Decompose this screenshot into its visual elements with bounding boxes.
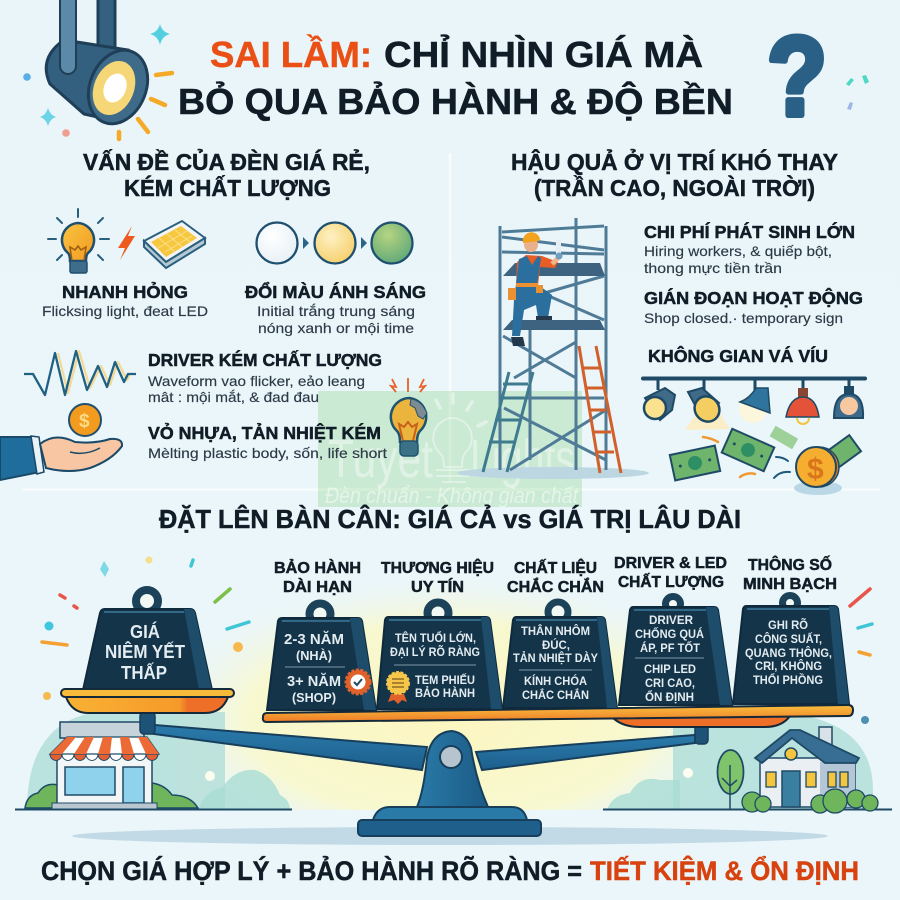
heading: consequences: (TRẦN CAO, NGOÀI TRỜI): [534, 174, 815, 201]
text: colour shift: nóng xanh or mội time: [258, 320, 414, 336]
icon: hand with coin: [0, 404, 122, 480]
title: [178, 34, 733, 122]
watermark: Đèn chuẩn - Không gian chất: [325, 483, 579, 508]
weight: solid materials: CHẤT LIỆU: [514, 559, 597, 577]
heading: problems: [83, 147, 370, 201]
text: patchy space: KHÔNG GIAN VÁ VÍU: [648, 345, 828, 366]
weight: solid materials: KÍNH CHÓA: [524, 675, 587, 688]
icon: money flying away: $: [807, 453, 824, 486]
conclusion: [41, 854, 859, 886]
scene backdrop: [27, 592, 873, 810]
ground shadow: [72, 827, 828, 845]
text: colour shift: ĐỔI MÀU ÁNH SÁNG: [245, 281, 426, 302]
panel: consequences in hard to reach spots: [457, 147, 865, 495]
weight: driver and LED quality: DRIVER & LED: [614, 555, 727, 572]
title: SAI LẦM:: [210, 34, 372, 75]
weight: solid materials: [503, 559, 617, 708]
illustration: shop: [25, 722, 198, 809]
text: disrupted operations: [644, 287, 863, 326]
icon: question mark: ?: [767, 14, 827, 139]
weight: transparent specs: MINH BẠCH: [743, 576, 837, 593]
icon: track spotlight: [46, 0, 158, 133]
icon: money flying away: [670, 426, 861, 495]
weight: low listed price: THẤP: [121, 662, 167, 683]
illustration: scaffold with worker: [457, 218, 649, 479]
weight: solid materials: CHẮC CHẮN: [507, 578, 604, 596]
heading: consequences: HẬU QUẢ Ở VỊ TRÍ KHÓ THAY: [511, 147, 838, 175]
orange pan: [61, 689, 234, 713]
weight: transparent specs: CÔNG SUẤT,: [755, 633, 822, 646]
weight group: long term value: [267, 555, 849, 710]
icon: question mark: [767, 14, 869, 139]
icon: hand with coin: $: [79, 411, 90, 432]
ground lines: [15, 808, 892, 810]
weight: reputable brand: TEM PHIẾU: [415, 674, 475, 687]
weight: solid materials: THÂN NHÔM: [521, 625, 590, 638]
weight: low listed price: NIÊM YẾT: [105, 641, 185, 662]
text: extra costs: thong mực tiền trần: [644, 260, 782, 276]
weight: long warranty: [267, 560, 376, 710]
title: CHỈ NHÌN GIÁ MÀ: [384, 34, 703, 75]
illustration: balance stand and beam: [140, 712, 708, 836]
icon: flicker waveform: [24, 351, 136, 395]
text: plastic housing: Mèlting plastic body, sốn, life short: [148, 445, 387, 461]
weight: reputable brand: [377, 559, 502, 709]
weight: solid materials: TẢN NHIỆT DÀY: [513, 652, 598, 665]
weight: long warranty: DÀI HẠN: [283, 579, 352, 596]
icon: colour shift circles: [256, 222, 412, 264]
weight: transparent specs: QUANG THÔNG,: [745, 647, 832, 660]
weight: transparent specs: [733, 556, 849, 704]
icon: mismatched track lights: [643, 378, 865, 430]
text: colour shift: Initial trắng trung sáng: [257, 303, 415, 319]
right pan plank: [263, 705, 853, 727]
panel: problems of cheap lights: [0, 147, 427, 480]
watermark: [318, 391, 582, 508]
conclusion: CHỌN GIÁ HỢP LÝ + BẢO HÀNH RÕ RÀNG =: [41, 854, 582, 886]
weight: driver and LED quality: ỔN ĐỊNH: [645, 691, 694, 704]
weight: solid materials: CHẮC CHẮN: [522, 689, 589, 702]
text: extra costs: [644, 221, 855, 276]
weight: driver and LED quality: DRIVER: [649, 615, 694, 627]
weight: reputable brand: TÊN TUỔI LỚN,: [395, 632, 476, 645]
weight: solid materials: ĐÚC,: [542, 639, 570, 652]
text: plastic housing: [148, 422, 387, 461]
text: poor driver: [148, 349, 382, 405]
text: poor driver: Waveform vao flicker, eảo leang: [148, 373, 365, 389]
weight: long warranty: (NHÀ): [296, 648, 332, 663]
text: disrupted operations: GIÁN ĐOẠN HOẠT ĐỘNG: [644, 287, 863, 308]
watermark: Lights: [470, 429, 575, 489]
text: fails quickly: [42, 281, 208, 319]
weight: long warranty: (SHOP): [292, 691, 336, 705]
text: disrupted operations: Shop closed.· temporary sign: [644, 310, 843, 326]
weight: long warranty: 2-3 NĂM: [284, 631, 344, 648]
spotlight rays and sparkles: [23, 24, 172, 139]
weight: driver and LED quality: ÁP, PF TỐT: [640, 641, 700, 655]
left pan with low price weight: [61, 590, 234, 713]
text: extra costs: CHI PHÍ PHÁT SINH LỚN: [644, 221, 855, 242]
heading: problems: VẤN ĐỀ CỦA ĐÈN GIÁ RẺ,: [83, 147, 370, 175]
confetti accents: [42, 556, 872, 724]
weight: long warranty: 3+ NĂM: [287, 673, 341, 690]
weight: low listed price: GIÁ: [130, 621, 160, 642]
illustration: house and tree: [718, 727, 878, 813]
icon: burnt bulb: [391, 378, 427, 456]
text: poor driver: DRIVER KÉM CHẤT LƯỢNG: [148, 349, 382, 370]
heading: scales: ĐẶT LÊN BÀN CÂN: GIÁ CẢ vs GIÁ TRỊ LÂU DÀI: [159, 504, 741, 534]
weight: driver and LED quality: CRI CAO,: [645, 678, 695, 690]
heading: problems: KÉM CHẤT LƯỢNG: [124, 174, 331, 201]
watermark: Tuyet: [328, 429, 433, 489]
weight: transparent specs: THÔNG SỐ: [748, 556, 832, 574]
text: fails quickly: Flicksing light, đeat LED: [42, 303, 208, 319]
icon: flickering bulb, bolt and LED chip: [48, 209, 205, 273]
text: colour shift: [245, 281, 426, 336]
weight: reputable brand: ĐẠI LÝ RÕ RÀNG: [390, 646, 480, 659]
text: poor driver: mât : mội mắt, & đad đau: [148, 389, 319, 405]
weight: transparent specs: THỔI PHỒNG: [753, 674, 823, 687]
weight: reputable brand: BẢO HÀNH: [415, 687, 475, 700]
conclusion: TIẾT KIỆM & ỔN ĐỊNH: [590, 855, 859, 886]
weight: transparent specs: GHI RÕ: [768, 619, 808, 632]
section dividers: [22, 153, 880, 490]
text: fails quickly: NHANH HỎNG: [62, 281, 188, 302]
weight: low listed price: [83, 590, 212, 690]
weight: driver and LED quality: CHIP LED: [644, 664, 696, 676]
weight: long warranty: BẢO HÀNH: [274, 560, 361, 577]
heading: consequences: [511, 147, 838, 201]
weight: driver and LED quality: CHẤT LƯỢNG: [618, 574, 724, 591]
weight: reputable brand: THƯƠNG HIỆU: [381, 559, 494, 577]
title: BỎ QUA BẢO HÀNH & ĐỘ BỀN: [178, 80, 733, 122]
text: plastic housing: VỎ NHỰA, TẢN NHIỆT KÉM: [148, 422, 381, 443]
weight: driver and LED quality: CHỐNG QUÁ: [635, 627, 704, 641]
weight: reputable brand: UY TÍN: [411, 579, 464, 596]
text: extra costs: Hiring workers, & quiếp bột,: [644, 243, 832, 259]
weight: transparent specs: CRI, KHÔNG: [755, 660, 822, 673]
weight: driver and LED quality: [614, 555, 732, 705]
